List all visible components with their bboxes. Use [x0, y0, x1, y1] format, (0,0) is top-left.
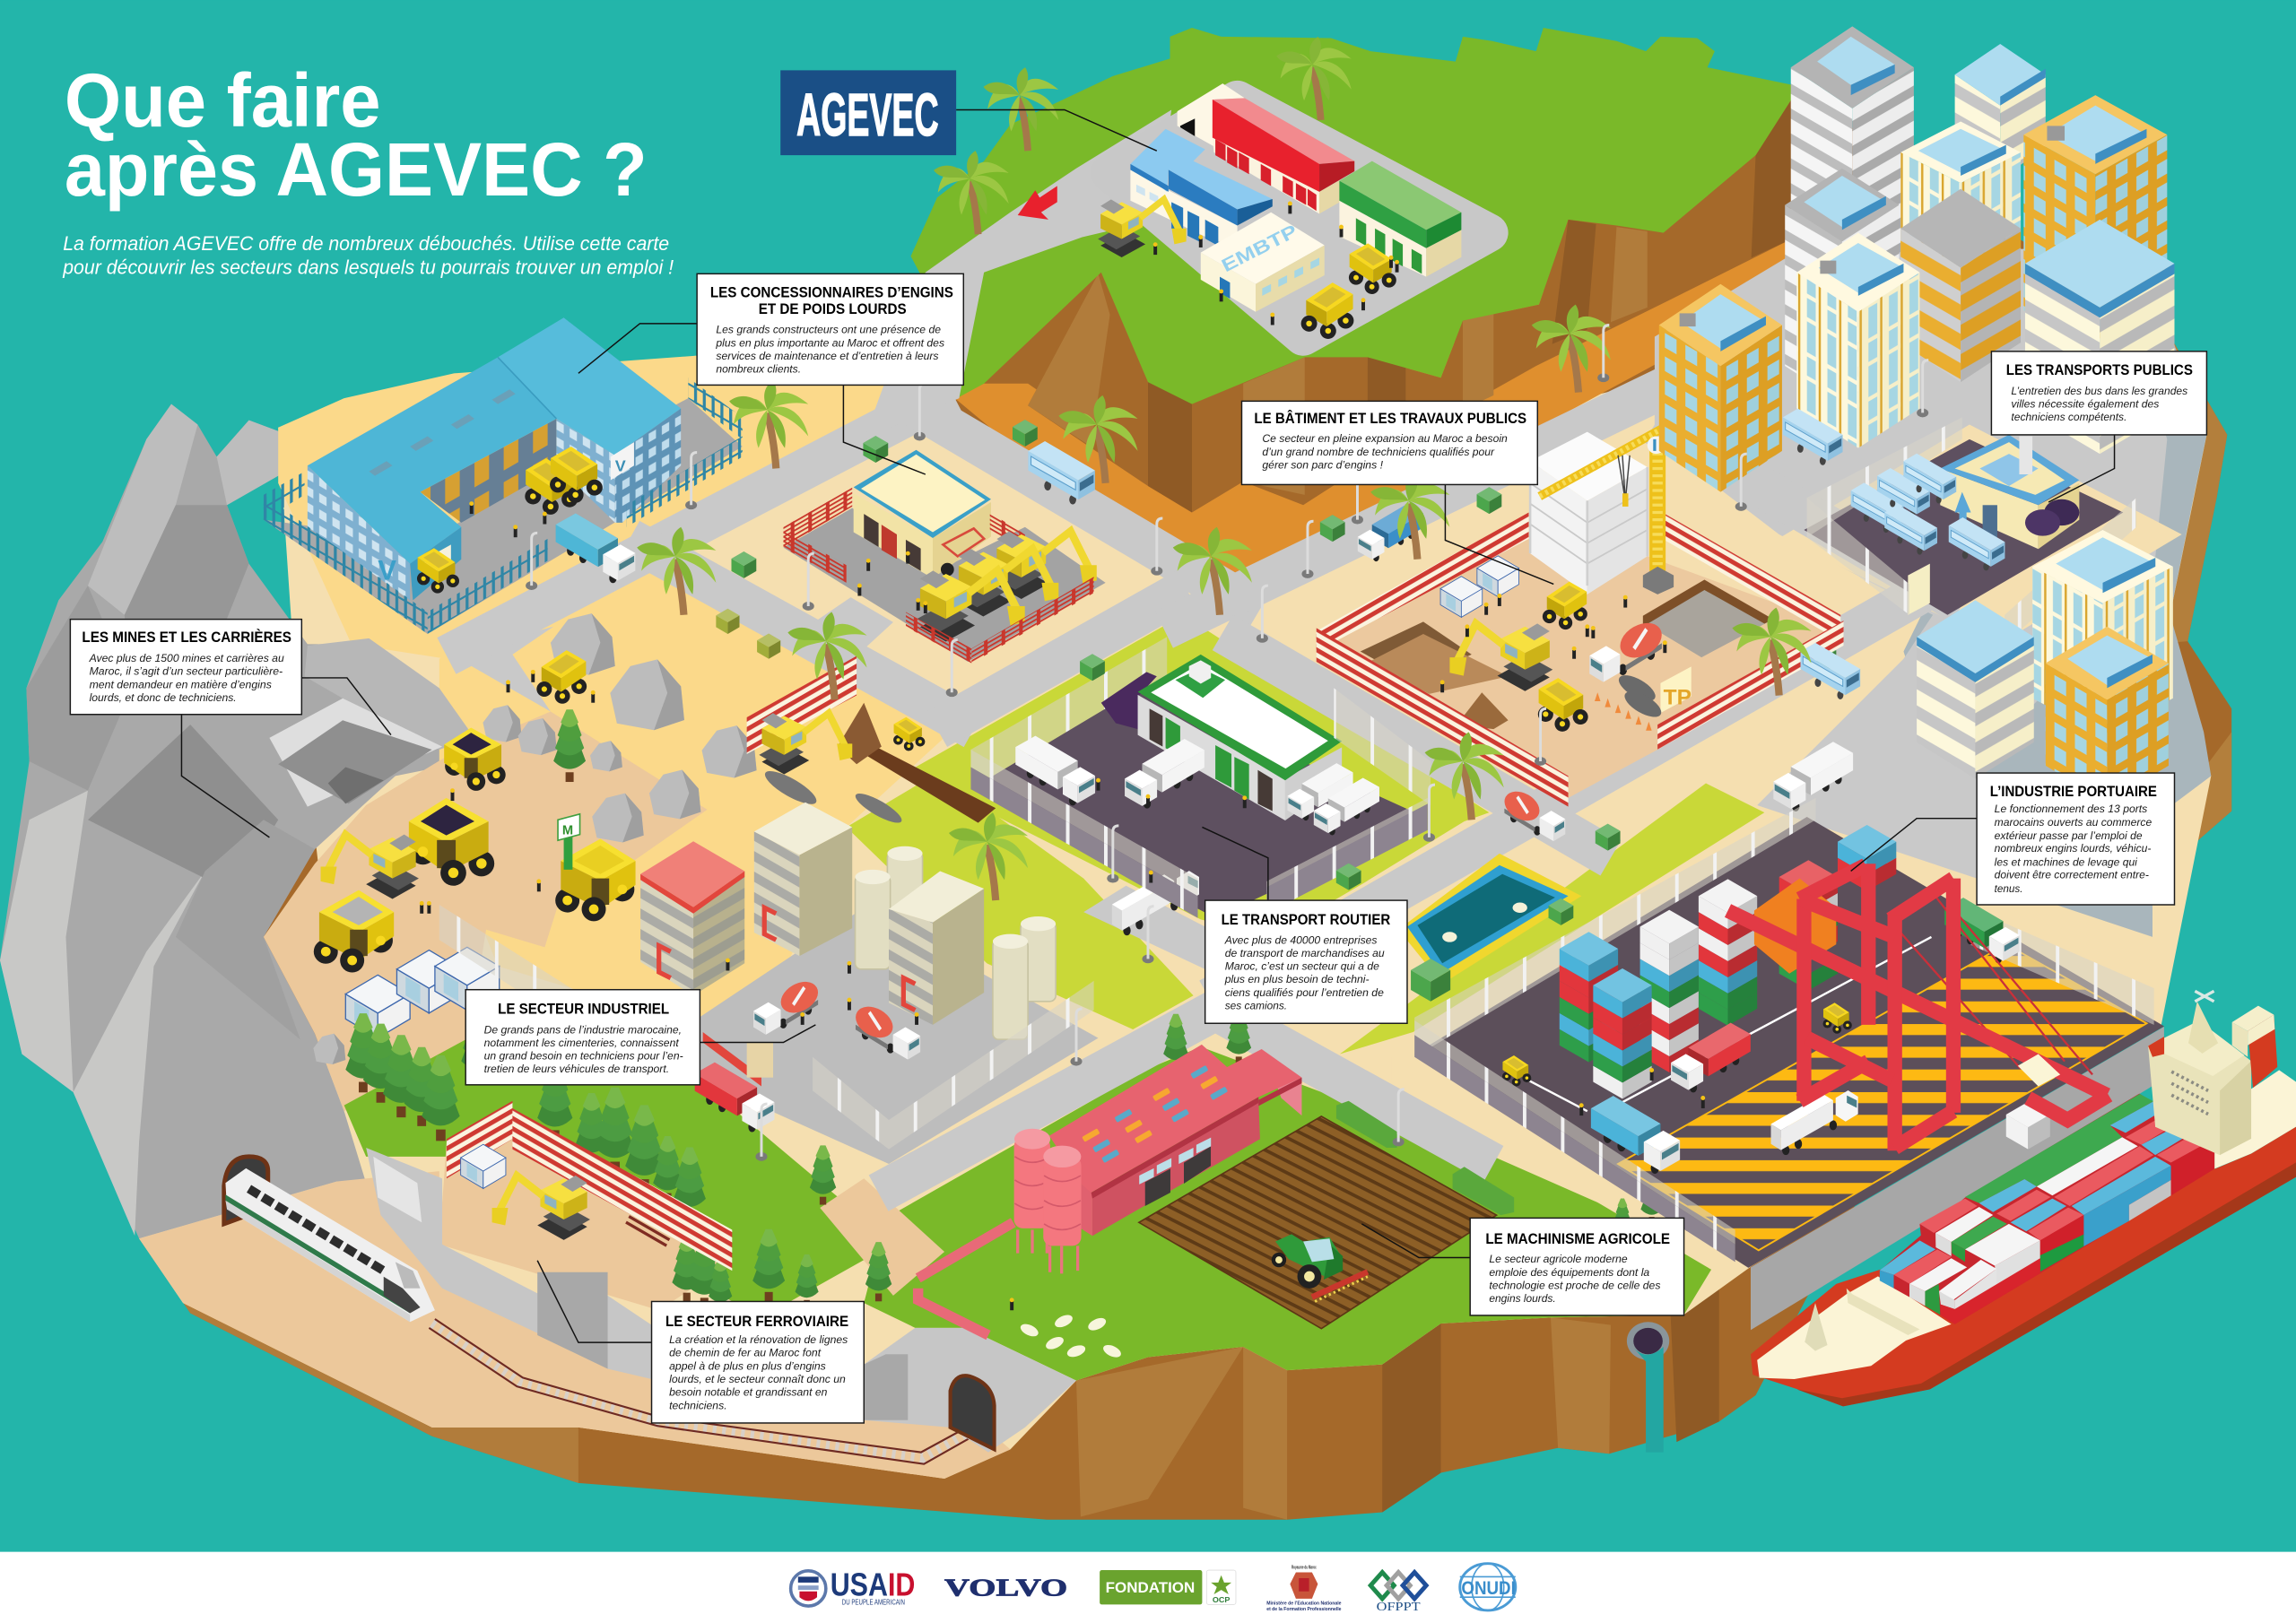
title: Que faire: [65, 57, 380, 143]
callout: secteur industriel: LE SECTEUR INDUSTRIEL: [498, 1001, 669, 1018]
sand ground: [278, 356, 967, 1025]
callout: mines: LES MINES ET LES CARRIÈRES: [82, 629, 291, 646]
panel: container ship: [1751, 991, 2296, 1406]
callout: mines: Avec plus de 1500 mines et carrières au: [89, 652, 284, 664]
callout: secteur industriel: un grand besoin en techniciens pour l’en-: [484, 1049, 683, 1062]
panel: blue Volvo warehouse: V: [378, 555, 396, 586]
green forest ground: [344, 1038, 879, 1317]
panel: railway worksite: [447, 1101, 732, 1271]
callout: mines: Maroc, il s’agit d’un secteur particulière-: [90, 665, 283, 678]
callout: transport routier: plus en plus besoin de techni-: [1224, 973, 1370, 985]
callout: machinisme agricole: technologie est proche de celle des: [1489, 1280, 1660, 1292]
panel: hedges: [1336, 1101, 1514, 1215]
logo: Fondation OCP: [1100, 1570, 1236, 1604]
callout: transport routier: Avec plus de 40000 entreprises: [1224, 933, 1378, 946]
callout: concessionnaires: LES CONCESSIONNAIRES D’ENGINS: [710, 283, 953, 300]
callout: industrie portuaire: les et machines de levage qui: [1995, 856, 2137, 869]
panel: EMBTP training compound: EMBTP: [1219, 221, 1300, 276]
panel: red gantry crane: [1728, 864, 2109, 1150]
panel: container stacks: [1560, 825, 1896, 1098]
callout: secteur ferroviaire: LE SECTEUR FERROVIAIRE: [665, 1313, 848, 1330]
callout: transports publics: [1991, 352, 2206, 435]
logo: ONUDI: ONUDI: [1461, 1578, 1516, 1599]
title line two: après AGEVEC ?: [65, 126, 648, 212]
mine corridor: [451, 627, 553, 711]
panel: bus depot: [1804, 417, 2136, 644]
orange ground under hill: [937, 220, 1808, 590]
icon: water outfall pipe: [1627, 1322, 1669, 1453]
callout: secteur industriel: [465, 990, 700, 1085]
logo: Volvo: VOLVO: [944, 1575, 1067, 1602]
panel: blue Volvo warehouse: [264, 317, 743, 634]
panel: mine vehicles and rocks: [313, 613, 757, 1064]
callout: secteur ferroviaire: besoin notable et grandissant en: [669, 1386, 828, 1399]
callout: secteur industriel: tretien de leurs véhicules de transport.: [484, 1063, 669, 1075]
callout: batiment: LE BÂTIMENT ET LES TRAVAUX PUBLICS: [1254, 410, 1526, 427]
callout: machinisme agricole: engins lourds.: [1489, 1292, 1556, 1305]
callout: secteur industriel: notamment les cimenteries, connaissent: [484, 1037, 679, 1049]
callout: transport routier: [1205, 900, 1407, 1023]
logo: Fondation OCP: OCP: [1213, 1596, 1231, 1604]
logo: Fondation OCP: FONDATION: [1106, 1580, 1195, 1596]
panel: industrial cement plant: [640, 803, 1098, 1164]
panel: port yard: [1414, 798, 2164, 1330]
callout: machinisme agricole: emploie des équipements dont la: [1489, 1266, 1649, 1279]
green hill: [911, 28, 1792, 404]
callout: machinisme agricole: LE MACHINISME AGRICOLE: [1485, 1230, 1670, 1247]
callout: concessionnaires: Les grands constructeurs ont une présence de: [716, 323, 941, 335]
callout: industrie portuaire: extérieur passe par l’emploi de: [1995, 829, 2143, 842]
panel: farm barn and silos: [918, 1045, 1301, 1359]
panel: grey retaining walls: [366, 1148, 652, 1379]
beige mine floor: [264, 711, 708, 1111]
callout: concessionnaires: [697, 273, 963, 385]
city blue-grey ground: [1903, 293, 2211, 937]
callout: industrie portuaire: doivent être correctement entre-: [1995, 869, 2149, 881]
callout: transport routier: ses camions.: [1225, 999, 1287, 1011]
hill road: [864, 109, 1171, 439]
logo: Ministere: Ministère de l’Education Nationale: [1266, 1601, 1342, 1606]
callout: industrie portuaire: [1977, 773, 2174, 905]
callout: secteur ferroviaire: [652, 1301, 864, 1423]
subtitle text block: [62, 232, 674, 278]
bottom sand and railway ground: [139, 1171, 1011, 1479]
callout: batiment: Ce secteur en pleine expansion au Maroc a besoin: [1262, 432, 1508, 445]
panel: city buildings back row: [1659, 26, 2174, 492]
callout: batiment: gérer son parc d’engins !: [1262, 458, 1384, 471]
road network: [447, 385, 1962, 1193]
AGEVEC logo box: [780, 70, 956, 155]
AGEVEC logo box: AGEVEC: [796, 82, 939, 149]
panel: construction site: [1317, 407, 1860, 841]
callout: concessionnaires: nombreux clients.: [716, 362, 801, 375]
callout: concessionnaires: services de maintenance et d’entretien à leurs: [716, 350, 939, 362]
logo: Ministere: [1266, 1565, 1342, 1612]
lime ground: [847, 615, 1764, 1057]
hill cliff: [1028, 98, 1792, 512]
logo: OFPPT: OFPPT: [1377, 1601, 1421, 1614]
panel: swimming pond: [1398, 854, 1581, 1002]
callout: transport routier: de transport de marchandises au: [1225, 947, 1385, 959]
callout: industrie portuaire: nombreux engins lourds, véhicu-: [1995, 842, 2151, 855]
volvo lot ground: [264, 398, 743, 634]
city roads ground: [1655, 249, 2167, 879]
callout leader lines: [181, 109, 2115, 1342]
subtitle text block: La formation AGEVEC offre de nombreux débouchés. Utilise cette carte: [63, 232, 669, 255]
logo: OFPPT: [1370, 1572, 1426, 1614]
callout: concessionnaires: ET DE POIDS LOURDS: [759, 300, 907, 317]
panel: pipe trench and roadworks: [747, 655, 996, 828]
callout: secteur ferroviaire: techniciens.: [669, 1399, 727, 1411]
callout: transports publics: villes nécessite également des: [2011, 398, 2159, 411]
logo: Ministere: Royaume du Maroc: [1292, 1565, 1317, 1570]
green farm ground: [864, 1046, 1743, 1381]
panel: port vehicles: [1502, 898, 2050, 1174]
subtitle text block: pour découvrir les secteurs dans lesquels tu pourrais trouver un emploi !: [62, 256, 674, 278]
rock massif: [0, 404, 468, 1238]
panel: ploughed field with tractor: [1139, 1116, 1497, 1329]
callout: mines: [70, 620, 301, 715]
callout: machinisme agricole: [1470, 1218, 1684, 1315]
panel: transport depot: [970, 637, 1435, 963]
callout: transports publics: techniciens compétents.: [2011, 411, 2126, 423]
panel: construction site: TP: [1664, 685, 1692, 709]
logo: USAID: DU PEUPLE AMERICAIN: [842, 1598, 905, 1606]
callout: concessionnaires: plus en plus importante au Maroc et offrent des: [715, 336, 944, 349]
callout: mines: lourds, et donc de techniciens.: [90, 691, 237, 704]
logo: USAID: [791, 1567, 915, 1606]
callout: secteur ferroviaire: de chemin de fer au Maroc font: [669, 1347, 822, 1359]
callout: mines: ment demandeur en matière d’engins: [90, 678, 272, 690]
callout: transport routier: Maroc, c’est un secteur qui a de: [1225, 960, 1379, 973]
icon: tunnel left: [224, 1157, 268, 1224]
callout: batiment: d’un grand nombre de techniciens qualifiés pour: [1262, 446, 1495, 458]
panel: port front fence: [1414, 1020, 1735, 1262]
callout: secteur industriel: De grands pans de l’industrie marocaine,: [484, 1024, 682, 1037]
panel: forest: [345, 1005, 1703, 1312]
panel: street details: [716, 325, 1928, 1146]
icon: tunnel hill right: [864, 1328, 1076, 1453]
logo: USAID: USAID: [831, 1567, 915, 1603]
panel: blue Volvo warehouse: V: [615, 457, 626, 475]
callout: secteur ferroviaire: lourds, et le secteur connaît donc un: [669, 1373, 846, 1385]
panel: dealership yard: [783, 450, 1106, 664]
callout: secteur ferroviaire: La création et la rénovation de lignes: [669, 1333, 848, 1346]
icon: high speed train: [225, 1168, 435, 1322]
railway worksite ground: [439, 1113, 732, 1310]
callout: industrie portuaire: tenus.: [1995, 882, 2023, 895]
panel: city buildings front row: [1773, 530, 2173, 812]
logo: ONUDI: [1460, 1564, 1516, 1610]
callout: transports publics: L’entretien des bus dans les grandes: [2011, 385, 2187, 397]
callout: machinisme agricole: Le secteur agricole moderne: [1489, 1253, 1628, 1265]
island surface base: [139, 341, 2211, 1479]
callout: transports publics: LES TRANSPORTS PUBLICS: [2006, 361, 2193, 378]
footer band: [0, 1552, 2296, 1623]
panel: palm trees: [637, 37, 1812, 900]
callout: industrie portuaire: Le fonctionnement des 13 ports: [1995, 803, 2147, 815]
pale plots: [732, 424, 2182, 1271]
callout: industrie portuaire: marocains ouverts au commerce: [1995, 816, 2152, 829]
panel: mine vehicles and rocks: M: [562, 824, 573, 838]
open pit mine: [269, 638, 474, 807]
panel: rail track: [429, 1319, 991, 1464]
callout: transport routier: LE TRANSPORT ROUTIER: [1222, 911, 1390, 928]
panel: EMBTP training compound: [1098, 83, 1489, 339]
callout: transport routier: ciens qualifiés pour l’entretien de: [1225, 986, 1384, 999]
sandy path: [820, 1178, 944, 1296]
callout: secteur ferroviaire: appel à de plus en plus d’engins: [669, 1359, 826, 1372]
logo: Ministere: et de la Formation Professionnelle: [1266, 1607, 1342, 1612]
callout: industrie portuaire: L’INDUSTRIE PORTUAIRE: [1990, 783, 2157, 800]
icon: red arrow: [1018, 186, 1057, 220]
callout: batiment: [1241, 401, 1537, 484]
